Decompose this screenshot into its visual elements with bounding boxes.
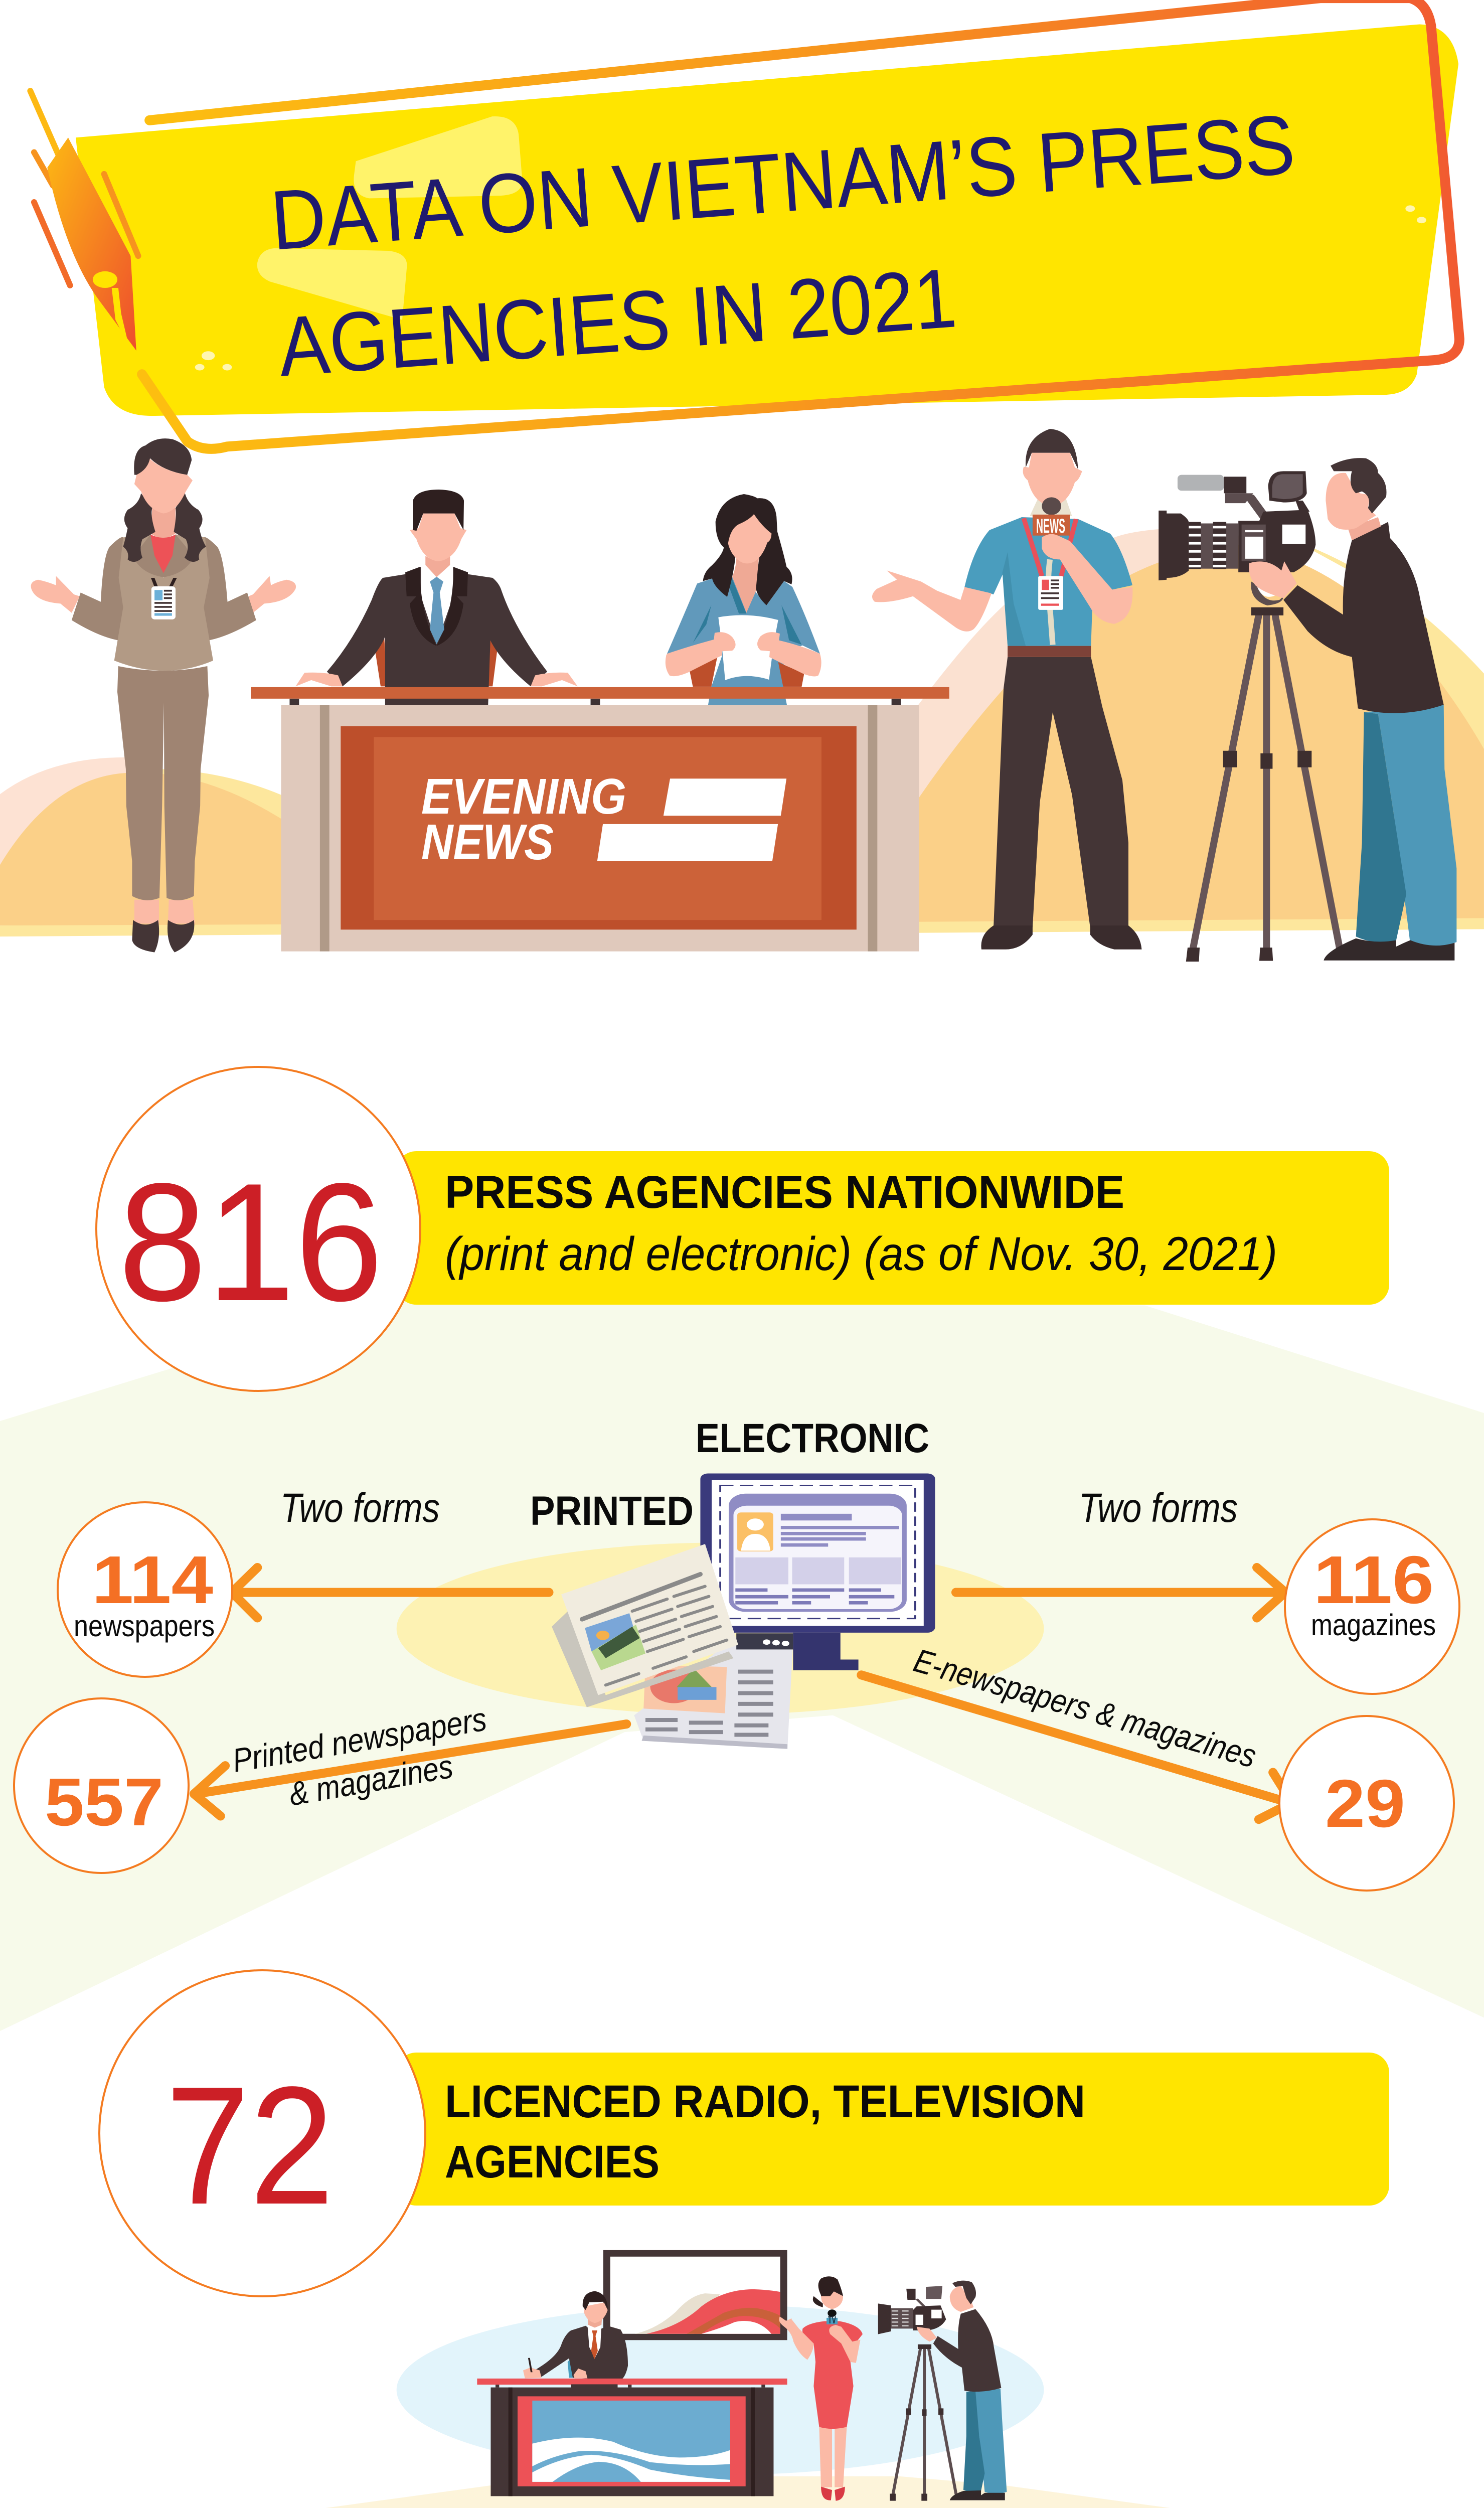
desk label line 2: NEWS bbox=[421, 814, 554, 870]
heading line 1: LICENCED RADIO, TELEVISION bbox=[445, 2076, 1085, 2127]
illustration: field reporter: NEWS bbox=[1036, 515, 1065, 537]
circle 816 bbox=[96, 1067, 420, 1391]
illustration: tv studio bbox=[477, 2250, 1007, 2501]
illustration: cameraman with tripod bbox=[1159, 458, 1456, 962]
label: electronic: ELECTRONIC bbox=[696, 1416, 929, 1461]
stat: 116 magazines bbox=[1285, 1519, 1459, 1694]
arrow label: e-newspapers and magazines: E-newspapers & magazines bbox=[910, 1641, 1260, 1775]
circle 72 bbox=[99, 1970, 425, 2296]
number 816: 816 bbox=[118, 1148, 383, 1336]
title text: DATA ON VIETNAM’S PRESS bbox=[268, 97, 1298, 268]
illustration: female news anchor bbox=[666, 494, 821, 706]
panel: pale green background behind press diagram bbox=[0, 1299, 1484, 2031]
panel: press agencies heading bbox=[96, 1067, 1389, 1391]
stat: 557: 557 bbox=[45, 1764, 163, 1840]
icon: pen nib bbox=[30, 91, 138, 351]
banner yellow shape bbox=[76, 24, 1458, 416]
arrow: to e-newspapers and magazines bbox=[861, 1675, 1292, 1819]
illustration: news desk bbox=[251, 687, 949, 952]
heading line 2: AGENCIES bbox=[445, 2136, 659, 2187]
label: two forms left: Two forms bbox=[280, 1485, 440, 1531]
arrow: to newspapers bbox=[232, 1568, 549, 1618]
label: two forms right: Two forms bbox=[1079, 1485, 1238, 1531]
desk label: EVENING bbox=[421, 768, 626, 825]
stat: 114 newspapers: newspapers bbox=[74, 1609, 215, 1643]
arrow: to magazines bbox=[956, 1568, 1285, 1618]
panel: radio and television heading bbox=[99, 1970, 1389, 2296]
arrow: to printed newspapers and magazines bbox=[194, 1724, 626, 1816]
heading text: PRESS AGENCIES NATIONWIDE bbox=[445, 1167, 1124, 1218]
stat: 114 newspapers: 114 bbox=[92, 1542, 213, 1618]
icon: newspapers bbox=[552, 1544, 793, 1749]
heading bar bbox=[396, 2053, 1389, 2206]
banner outline bbox=[142, 0, 1459, 449]
background hills left bbox=[0, 757, 281, 936]
mic flag: TV: TV bbox=[828, 2315, 836, 2326]
stat: 29 bbox=[1279, 1716, 1454, 1891]
arrow label: printed newspapers: Printed newspapers bbox=[230, 1700, 489, 1779]
studio floor and backdrop bbox=[85, 2305, 1410, 2508]
title banner bbox=[30, 0, 1459, 449]
stat: 557 bbox=[14, 1698, 189, 1873]
stat: 114 newspapers bbox=[58, 1502, 232, 1677]
heading subtitle: (print and electronic) (as of Nov. 30, 2021) bbox=[445, 1227, 1277, 1281]
illustration: reporter woman bbox=[31, 438, 296, 953]
label: printed: PRINTED bbox=[530, 1488, 694, 1534]
stat: 29: 29 bbox=[1325, 1766, 1405, 1841]
heading bar bbox=[396, 1151, 1389, 1305]
illustration: male news anchor bbox=[295, 490, 578, 705]
illustration: field reporter bbox=[872, 429, 1141, 950]
stat: 116 magazines: magazines bbox=[1311, 1608, 1436, 1642]
background hills right bbox=[917, 528, 1484, 933]
number 72: 72 bbox=[166, 2052, 334, 2239]
title text line 2: AGENCIES IN 2021 bbox=[275, 250, 959, 394]
arrow label: and magazines: & magazines bbox=[286, 1748, 455, 1813]
stat: 116 magazines: 116 bbox=[1313, 1542, 1434, 1618]
icon: computer monitor bbox=[700, 1474, 935, 1670]
